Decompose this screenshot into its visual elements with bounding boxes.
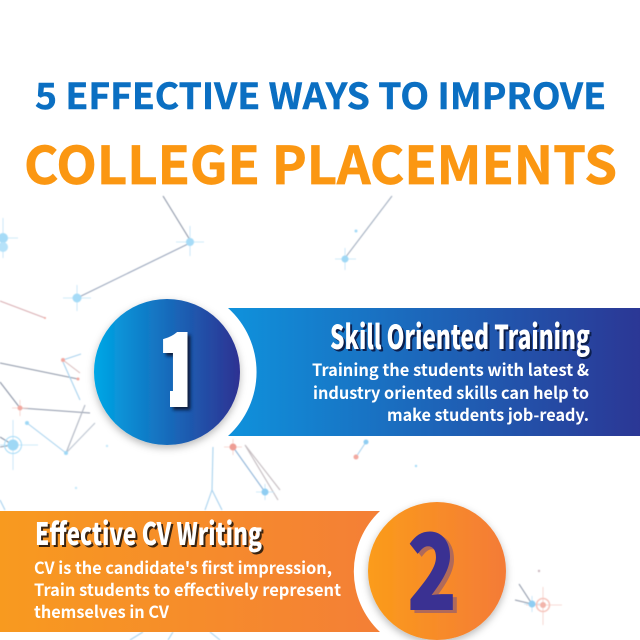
banner 2 xyxy=(0,511,380,632)
number circle 1 xyxy=(94,291,240,445)
number 2 shadow and digit: 2 xyxy=(411,490,461,640)
banner 1 xyxy=(228,308,640,436)
background network pattern xyxy=(0,196,562,640)
panel: step 2 effective cv writing xyxy=(0,487,506,640)
number 2 shadow and digit: 2 xyxy=(407,487,457,640)
number circle 2 xyxy=(368,487,506,640)
number 1 shadow and digit: 1 xyxy=(157,291,201,437)
body text 1: industry oriented skills can help to xyxy=(313,380,589,404)
title line: college placements: COLLEGE PLACEMENTS xyxy=(24,124,617,199)
body text 2: themselves in CV xyxy=(34,599,170,623)
body text 1: Training the students with latest & xyxy=(312,357,589,381)
body text 1: make students job-ready. xyxy=(387,402,589,426)
body text 1 xyxy=(312,357,589,426)
number 1 shadow and digit: 1 xyxy=(160,294,204,440)
body text 2 xyxy=(34,555,341,623)
title line: 5 effective ways: 5 EFFECTIVE WAYS TO IMPROVE xyxy=(35,68,606,120)
heading: effective cv writing: Effective CV Writing xyxy=(37,511,264,556)
heading: effective cv writing: Effective CV Writing xyxy=(35,509,262,554)
panel: step 1 skill oriented training xyxy=(94,291,640,445)
body text 2: Train students to effectively represent xyxy=(34,577,341,601)
body text 2: CV is the candidate's first impression, xyxy=(34,555,332,579)
number 1 shadow and digit xyxy=(163,332,193,412)
